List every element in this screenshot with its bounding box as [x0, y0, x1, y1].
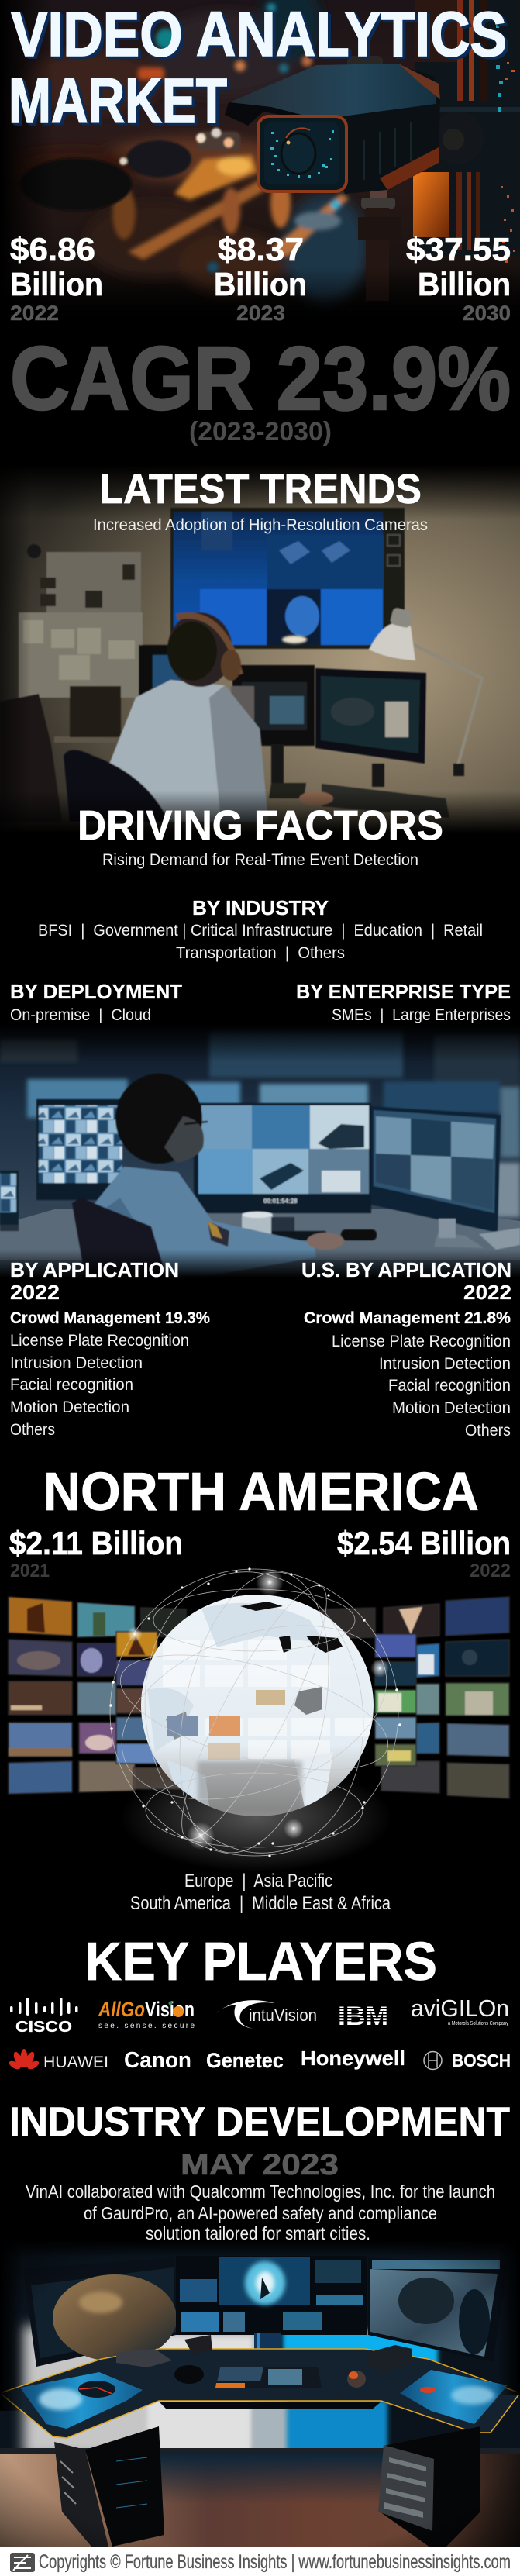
logo: intuVision: intuVision: [249, 2005, 317, 2025]
key players heading: KEY PLAYERS: [85, 1931, 437, 1991]
front row right screens: [375, 1634, 416, 1766]
heading: BY ENTERPRISE TYPE: [296, 980, 511, 1003]
subtitle: Rising Demand for Real-Time Event Detection: [102, 851, 418, 869]
left column 2: [77, 1602, 186, 1792]
logo: AllGoVision: AllGo: [98, 1998, 145, 2021]
left monitor: [23, 2257, 177, 2367]
right monitor: [368, 2257, 508, 2362]
center monitor: 00:01:54:28: [263, 1198, 298, 1205]
logo row 1: [10, 1995, 509, 2036]
right column 6: [321, 1604, 439, 1793]
operator chair: [64, 750, 169, 822]
light flares: [127, 1568, 389, 1850]
keyboard and mouse: [271, 1229, 377, 1240]
logo: IBM: IBM: [338, 2002, 388, 2031]
by deployment segment: [10, 980, 182, 1024]
region line 1: Europe | Asia Pacific: [184, 1871, 332, 1891]
segment list: Others: [10, 1421, 55, 1439]
stat 2022: Billion: [10, 266, 103, 302]
by application 2022 block: [10, 1258, 210, 1439]
leading segment: Crowd Management 21.8%: [304, 1309, 511, 1327]
logo: AllGoVision: [98, 1998, 195, 2030]
segment list: Intrusion Detection: [379, 1355, 511, 1373]
desk underside: [159, 2402, 381, 2409]
computer mice: [174, 2365, 366, 2388]
U.S. by application 2022 block: [301, 1258, 511, 1440]
segment list: Facial recognition: [10, 1376, 133, 1394]
desk monitors: [139, 645, 426, 787]
center monitor: [194, 1103, 371, 1213]
security camera: [225, 56, 440, 194]
stat 2030: Billion: [418, 266, 511, 302]
value 2021: $2.11 Billion: [9, 1525, 183, 1561]
stat 2023: Billion: [214, 266, 307, 302]
segment list: [332, 1333, 511, 1440]
dark regions: [166, 1602, 343, 1740]
right monitor: [371, 1106, 501, 1248]
photo: gaming style workstation: [0, 2240, 520, 2547]
other regions: [130, 1871, 391, 1914]
left PC tower: [54, 2426, 164, 2547]
logo: Huawei: HUAWEI: [43, 2054, 108, 2071]
main title: [9, 0, 507, 136]
heading year: 2022: [10, 1281, 60, 1304]
logo: Bosch: [424, 2050, 511, 2071]
logo: Cisco: CISCO: [15, 2019, 72, 2036]
footer bar: [0, 2547, 520, 2576]
desk surface: [0, 1209, 520, 1260]
heading: DRIVING FACTORS: [77, 802, 443, 849]
video wall of screens: [9, 1597, 509, 1798]
desk top with yellow trim: [0, 2349, 520, 2438]
stat 2023: 2023: [236, 302, 285, 325]
heading: LATEST TRENDS: [99, 466, 422, 512]
keyboard and hand: [269, 783, 449, 818]
blurred background monitors: [0, 1031, 520, 1217]
stat 2030: $37.55: [406, 231, 511, 267]
soft halo: [120, 1764, 391, 1872]
segment list: Motion Detection: [392, 1399, 511, 1417]
stat 2022: [10, 231, 103, 325]
desk items: [116, 2335, 412, 2372]
stat 2023: [214, 231, 307, 325]
leading segment: Crowd Management 19.3%: [10, 1309, 210, 1327]
heading: NORTH AMERICA: [43, 1461, 479, 1522]
logo: Cisco: [10, 1998, 77, 2036]
keyboard: [215, 2367, 322, 2388]
development description: [26, 2181, 495, 2243]
latest trends section: [93, 466, 428, 534]
development description: of GaurdPro, an AI-powered safety and compliance: [84, 2203, 437, 2223]
icon: Fortune Business Insights logo: [10, 2553, 35, 2572]
heading year: 2022: [463, 1281, 511, 1304]
stat 2030: [406, 231, 511, 325]
segment list: Others: [465, 1422, 511, 1440]
wall mounted blue monitor: [170, 508, 405, 649]
segment list: Motion Detection: [10, 1398, 129, 1416]
heading: BY DEPLOYMENT: [10, 980, 182, 1003]
region line 2: South America | Middle East & Africa: [130, 1893, 391, 1914]
photo: operator watching monitors: [0, 465, 520, 848]
stat 2022: 2022: [10, 302, 59, 325]
center monitor: [176, 2256, 367, 2335]
right column 7: [446, 1597, 509, 1798]
left mat highlights: [39, 2381, 115, 2410]
heading: U.S. BY APPLICATION: [301, 1258, 511, 1281]
list line 2: Transportation | Others: [176, 944, 345, 962]
globe content clipped: [147, 1602, 374, 1814]
market size statistics: [10, 231, 511, 325]
CAGR period: (2023-2030): [189, 417, 332, 447]
north america section: [9, 1461, 511, 1581]
desk lamp: [369, 607, 482, 776]
right mouse mat: [400, 2370, 508, 2424]
hero image: street surveillance camera at night: [0, 0, 520, 333]
network nodes: [109, 1567, 401, 1857]
right PC tower: [378, 2426, 480, 2547]
floor: [0, 2448, 520, 2547]
heading: BY APPLICATION: [10, 1258, 179, 1281]
globe body: [141, 1595, 374, 1816]
list line 1: BFSI | Government | Critical Infrastructure | Education | Retail: [38, 922, 483, 940]
coat on the left: [0, 694, 62, 822]
logo row 2: [8, 2047, 511, 2073]
year 2022: 2022: [470, 1560, 511, 1581]
segment list: [10, 1332, 189, 1439]
segment list: Intrusion Detection: [10, 1354, 143, 1372]
segment list: License Plate Recognition: [10, 1332, 189, 1350]
logo: Honeywell: Honeywell: [301, 2047, 405, 2070]
light continents: [147, 1603, 333, 1814]
globe lower shadow: [198, 1761, 302, 1812]
year 2021: 2021: [10, 1560, 50, 1581]
right mat highlights: [420, 2386, 494, 2405]
left column 1: [9, 1597, 72, 1794]
stat 2030: 2030: [463, 302, 511, 325]
front row left screens: [116, 1632, 188, 1789]
operator chair back: [72, 1198, 167, 1278]
left monitor: [36, 1099, 122, 1200]
globe with network mesh: [109, 1567, 401, 1867]
logo: Avigilon: aviGILOn: [411, 1995, 509, 2022]
segment list: License Plate Recognition: [332, 1333, 511, 1350]
notes on desk: [479, 1228, 520, 1250]
heading: BY INDUSTRY: [192, 896, 329, 919]
development description: solution tailored for smart cities.: [146, 2223, 370, 2243]
camera support pole: [358, 180, 401, 301]
logo: Huawei: [8, 2049, 108, 2071]
segment list: Facial recognition: [388, 1377, 511, 1395]
logo: Canon: Canon: [124, 2048, 191, 2073]
logo: AllGoVision: see. sense. secure: [98, 2022, 195, 2030]
subtitle: Increased Adoption of High-Resolution Cameras: [93, 516, 428, 534]
left mouse mat: [20, 2372, 143, 2429]
date: MAY 2023: [181, 2149, 339, 2181]
driving factors section: [77, 802, 443, 869]
logo: Genetec: Genetec: [206, 2049, 284, 2072]
list: On-premise | Cloud: [10, 1006, 151, 1024]
photo fades: [0, 465, 520, 848]
photo fades: [0, 1023, 520, 1278]
shelf and box: [54, 686, 124, 743]
stat 2022: $6.86: [10, 231, 95, 267]
logo: Bosch: BOSCH: [452, 2050, 511, 2071]
by enterprise type segment: [296, 980, 511, 1024]
colored screen fragments: [256, 1690, 285, 1705]
photo: control room operator: [0, 1023, 520, 1278]
logo: intuVision: [215, 2000, 317, 2029]
title line 2: MARKET: [9, 66, 227, 136]
pinboard with papers: [19, 544, 143, 698]
coffee mug: [242, 1212, 294, 1239]
right wall with orange stripes: [413, 0, 520, 263]
operator: [108, 612, 268, 822]
by industry segment: [38, 896, 483, 962]
stat 2023: $8.37: [218, 231, 304, 267]
office operator: [87, 1074, 344, 1278]
laptop on left: [0, 1171, 19, 1231]
wall glow: [23, 2326, 438, 2457]
translucent screens in globe: [163, 1640, 374, 1759]
monitor vignette: [0, 2240, 520, 2547]
logo: AllGoVision: Vision: [145, 1998, 195, 2021]
hero left and bottom fades: [0, 0, 520, 333]
desk center stand: [254, 2333, 281, 2357]
network mesh lines: [98, 1557, 410, 1867]
